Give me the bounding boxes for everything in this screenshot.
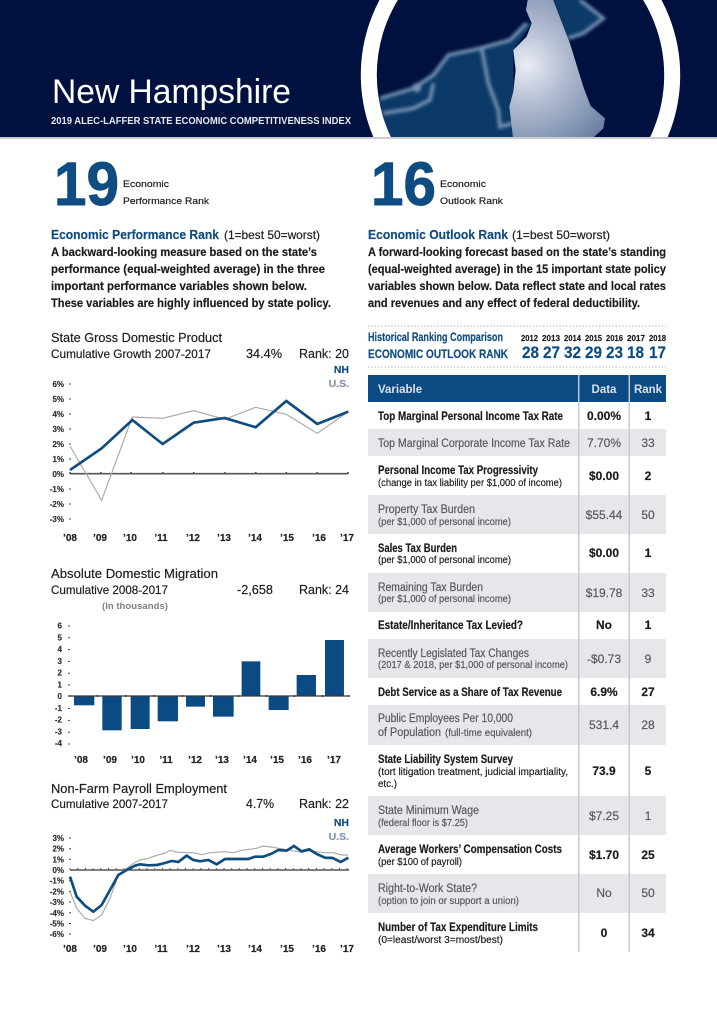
table header: Variable bbox=[378, 384, 422, 396]
chart heading: 4.7% bbox=[246, 796, 274, 811]
units note: (In thousands) bbox=[102, 601, 168, 612]
row: public employees: (full-time equivalent) bbox=[445, 728, 532, 739]
x axis years: ’16 bbox=[312, 944, 326, 955]
y axis bbox=[50, 380, 71, 524]
row: personal income tax rate bbox=[378, 409, 652, 423]
x axis years: ’17 bbox=[340, 944, 354, 955]
x axis years: ’10 bbox=[131, 755, 145, 766]
U.S. line bbox=[70, 846, 348, 921]
historical ranks bbox=[522, 343, 666, 362]
row: expenditure limits bbox=[378, 922, 655, 946]
panel: economic performance rank bbox=[51, 150, 331, 310]
y axis: -1% bbox=[50, 877, 64, 886]
row: remaining tax bbox=[378, 582, 655, 605]
row: legislated changes bbox=[378, 648, 652, 671]
row: debt service: 27 bbox=[641, 685, 655, 699]
x axis years: ’10 bbox=[123, 533, 137, 544]
chart heading: Absolute Domestic Migration bbox=[51, 566, 218, 581]
y axis: 1 bbox=[58, 680, 63, 689]
performance heading: Economic Performance Rank bbox=[51, 228, 219, 242]
y axis: 2% bbox=[52, 440, 64, 449]
row: personal income tax rate: 0.00% bbox=[587, 409, 621, 423]
row: public employees: Public Employees Per 10,000 bbox=[378, 713, 513, 725]
row: workers compensation: 25 bbox=[641, 848, 655, 862]
x axis years: ’13 bbox=[217, 944, 231, 955]
legend: NH bbox=[334, 817, 349, 829]
years: 2016 bbox=[606, 334, 624, 343]
row: estate tax: 1 bbox=[645, 618, 652, 632]
y axis: 4% bbox=[52, 410, 64, 419]
row: sales tax: Sales Tax Burden bbox=[378, 543, 457, 555]
row: workers compensation: Average Workers’ Compensation Costs bbox=[378, 844, 562, 856]
title: New Hampshire bbox=[52, 73, 291, 111]
row: tax progressivity bbox=[378, 465, 652, 489]
rank label bbox=[123, 179, 209, 207]
chart heading: Cumulative Growth 2007-2017 bbox=[51, 347, 211, 361]
y axis: -3% bbox=[50, 515, 64, 524]
historical ranks: 18 bbox=[627, 343, 644, 362]
performance description: A backward-looking measure based on the state’s bbox=[51, 245, 317, 259]
chart heading: -2,658 bbox=[237, 582, 273, 597]
row: debt service bbox=[378, 685, 655, 699]
x axis years: ’14 bbox=[243, 755, 257, 766]
row: legislated changes: (2017 & 2018, per $1,000 of personal income) bbox=[378, 660, 568, 671]
row: workers compensation bbox=[378, 844, 655, 868]
row: minimum wage: (federal floor is $7.25) bbox=[378, 818, 468, 829]
y axis: 1% bbox=[52, 855, 64, 864]
x axis years: ’15 bbox=[270, 755, 284, 766]
row: expenditure limits: 34 bbox=[641, 926, 655, 940]
historical ranks: 23 bbox=[606, 343, 623, 362]
row: right to work bbox=[378, 883, 655, 907]
x axis years: ’11 bbox=[154, 533, 168, 544]
outlook description bbox=[368, 245, 666, 310]
y axis bbox=[55, 622, 70, 748]
x axis years: ’09 bbox=[93, 533, 107, 544]
x axis years: ’14 bbox=[248, 533, 262, 544]
row: liability survey: State Liability System Survey bbox=[378, 754, 513, 766]
panel: variables table bbox=[368, 375, 666, 952]
row: corporate income tax rate: 33 bbox=[641, 436, 655, 450]
years: 2012 bbox=[521, 334, 539, 343]
performance heading: (1=best 50=worst) bbox=[224, 228, 320, 242]
row: property tax: $55.44 bbox=[586, 508, 623, 522]
outlook description: A forward-looking forecast based on the state’s standing bbox=[368, 245, 666, 259]
zero line bbox=[70, 472, 348, 474]
historical ranks: 32 bbox=[564, 343, 581, 362]
chart heading: 34.4% bbox=[246, 346, 282, 361]
row: public employees: of Population bbox=[378, 727, 441, 739]
y axis: 3% bbox=[52, 834, 64, 843]
row: remaining tax: $19.78 bbox=[586, 586, 623, 600]
historical ranks: 28 bbox=[522, 343, 539, 362]
chart heading: Rank: 24 bbox=[299, 582, 349, 597]
row: liability survey: 5 bbox=[645, 764, 652, 778]
row: minimum wage: $7.25 bbox=[589, 809, 619, 823]
row: sales tax bbox=[378, 543, 652, 566]
chart heading: Non-Farm Payroll Employment bbox=[51, 781, 227, 796]
outlook description: and revenues and any effect of federal deductibility. bbox=[368, 296, 640, 310]
x axis years: ’16 bbox=[312, 533, 326, 544]
y axis: 0% bbox=[52, 470, 64, 479]
y axis: 3 bbox=[58, 657, 63, 666]
chart heading: Rank: 20 bbox=[299, 346, 349, 361]
row: legislated changes: Recently Legislated Tax Changes bbox=[378, 648, 529, 660]
row: corporate income tax rate bbox=[378, 436, 655, 450]
y axis: 1% bbox=[52, 455, 64, 464]
chart heading: Cumulative 2008-2017 bbox=[51, 583, 168, 597]
subtitle: 2019 ALEC-LAFFER STATE ECONOMIC COMPETITIVENESS INDEX bbox=[51, 115, 351, 127]
x axis years: ’14 bbox=[248, 944, 262, 955]
big number 19: 19 bbox=[54, 150, 119, 218]
row: estate tax bbox=[378, 618, 652, 632]
alternate row shading bbox=[368, 429, 666, 913]
years: 2015 bbox=[585, 334, 603, 343]
y axis: -2% bbox=[50, 500, 64, 509]
row: property tax: (per $1,000 of personal income) bbox=[378, 517, 511, 528]
rank label: Economic bbox=[123, 179, 169, 190]
NH line bbox=[70, 846, 348, 912]
row: tax progressivity: Personal Income Tax Progressivity bbox=[378, 465, 538, 477]
y axis: -4 bbox=[55, 739, 63, 748]
rank label: Economic bbox=[440, 179, 486, 190]
row: minimum wage: State Minimum Wage bbox=[378, 805, 479, 817]
panel: historical ranking comparison bbox=[368, 326, 667, 367]
row: corporate income tax rate: Top Marginal Corporate Income Tax Rate bbox=[378, 438, 570, 450]
x axis years: ’11 bbox=[154, 944, 168, 955]
legend bbox=[329, 817, 349, 843]
y axis bbox=[50, 834, 71, 939]
y axis: 0% bbox=[52, 866, 64, 875]
chart heading bbox=[51, 781, 349, 811]
row: debt service: Debt Service as a Share of Tax Revenue bbox=[378, 687, 562, 699]
x axis years: ’10 bbox=[123, 944, 137, 955]
panel: payroll employment chart bbox=[50, 781, 354, 955]
row: legislated changes: 9 bbox=[645, 652, 652, 666]
row: tax progressivity: (change in tax liability per $1,000 of income) bbox=[378, 478, 562, 489]
x axis years: ’12 bbox=[186, 533, 200, 544]
performance heading bbox=[51, 228, 320, 242]
row: public employees: 531.4 bbox=[589, 718, 619, 732]
row: corporate income tax rate: 7.70% bbox=[587, 436, 621, 450]
y axis: 3% bbox=[52, 425, 64, 434]
x axis years: ’15 bbox=[280, 944, 294, 955]
row: sales tax: $0.00 bbox=[589, 546, 619, 560]
x axis years: ’17 bbox=[327, 755, 341, 766]
row: tax progressivity: $0.00 bbox=[589, 469, 619, 483]
row: expenditure limits: (0=least/worst 3=most/best) bbox=[378, 935, 503, 946]
y axis: 4 bbox=[58, 645, 63, 654]
legend: NH bbox=[334, 364, 349, 376]
row: right to work: No bbox=[596, 886, 612, 900]
x axis years: ’15 bbox=[280, 533, 294, 544]
y axis: -2% bbox=[50, 887, 64, 896]
row: expenditure limits: 0 bbox=[601, 926, 608, 940]
performance description: important performance variables shown below. bbox=[51, 279, 307, 293]
header banner bbox=[0, 0, 717, 139]
row: liability survey: 73.9 bbox=[592, 764, 616, 778]
y axis: -3% bbox=[50, 898, 64, 907]
row: estate tax: No bbox=[596, 618, 612, 632]
row: property tax: Property Tax Burden bbox=[378, 504, 475, 516]
row: sales tax: (per $1,000 of personal income) bbox=[378, 555, 511, 566]
map of New Hampshire in circle bbox=[360, 0, 680, 137]
comparison heading bbox=[368, 332, 509, 361]
row: remaining tax: (per $1,000 of personal income) bbox=[378, 594, 511, 605]
x axis years: ’16 bbox=[298, 755, 312, 766]
table header bbox=[368, 375, 666, 402]
y axis: -6% bbox=[50, 930, 64, 939]
x axis years: ’11 bbox=[159, 755, 173, 766]
row: remaining tax: 33 bbox=[641, 586, 655, 600]
x axis years bbox=[63, 944, 354, 955]
historical ranks: 27 bbox=[543, 343, 560, 362]
y axis: -1 bbox=[55, 704, 63, 713]
y axis: 5 bbox=[58, 633, 63, 642]
row: liability survey: (tort litigation treatment, judicial impartiality, bbox=[378, 767, 568, 778]
x axis years bbox=[74, 755, 341, 766]
table header: Rank bbox=[634, 384, 663, 396]
chart heading: Cumulative 2007-2017 bbox=[51, 797, 168, 811]
row: remaining tax: Remaining Tax Burden bbox=[378, 582, 483, 594]
row: expenditure limits: Number of Tax Expenditure Limits bbox=[378, 922, 538, 934]
y axis: -4% bbox=[50, 909, 64, 918]
years: 2017 bbox=[627, 334, 646, 343]
chart heading: State Gross Domestic Product bbox=[51, 330, 222, 345]
row: workers compensation: $1.70 bbox=[589, 848, 619, 862]
x axis years: ’08 bbox=[74, 755, 88, 766]
row: liability survey: etc.) bbox=[378, 779, 397, 790]
x axis years: ’12 bbox=[186, 944, 200, 955]
x axis years bbox=[63, 533, 354, 544]
years: 2014 bbox=[564, 334, 582, 343]
row: public employees bbox=[378, 713, 655, 739]
years: 2013 bbox=[542, 334, 561, 343]
y axis: -2 bbox=[55, 716, 63, 725]
y axis: 5% bbox=[52, 395, 64, 404]
row: debt service: 6.9% bbox=[590, 685, 618, 699]
panel: economic outlook rank bbox=[368, 150, 666, 310]
row: personal income tax rate: 1 bbox=[645, 409, 652, 423]
row: right to work: 50 bbox=[641, 886, 655, 900]
zero line bbox=[70, 868, 349, 870]
x axis years: ’09 bbox=[93, 944, 107, 955]
row: property tax: 50 bbox=[641, 508, 655, 522]
bars bbox=[74, 640, 344, 730]
y axis: 2 bbox=[58, 669, 63, 678]
x axis years: ’09 bbox=[103, 755, 117, 766]
row: minimum wage bbox=[378, 805, 652, 829]
chart heading bbox=[51, 330, 349, 361]
legend: U.S. bbox=[329, 378, 349, 390]
row: estate tax: Estate/Inheritance Tax Levied? bbox=[378, 620, 523, 632]
row: tax progressivity: 2 bbox=[645, 469, 652, 483]
performance description bbox=[51, 245, 331, 310]
rank label bbox=[440, 179, 503, 207]
comparison heading: ECONOMIC OUTLOOK RANK bbox=[368, 349, 509, 361]
NH line bbox=[70, 401, 348, 470]
historical ranks: 17 bbox=[649, 343, 666, 362]
outlook description: variables shown below. Data reflect state and local rates bbox=[368, 279, 666, 293]
outlook heading bbox=[368, 228, 610, 242]
rank label: Outlook Rank bbox=[440, 196, 503, 207]
row: right to work: Right-to-Work State? bbox=[378, 883, 477, 895]
row: workers compensation: (per $100 of payroll) bbox=[378, 857, 462, 868]
chart heading: Rank: 22 bbox=[299, 796, 349, 811]
y axis: 0 bbox=[58, 692, 63, 701]
years bbox=[521, 334, 667, 343]
x axis years: ’13 bbox=[215, 755, 229, 766]
x axis years: ’12 bbox=[188, 755, 202, 766]
performance description: These variables are highly influenced by state policy. bbox=[51, 296, 331, 310]
row: legislated changes: -$0.73 bbox=[587, 652, 621, 666]
U.S. line bbox=[70, 407, 348, 500]
y axis: -5% bbox=[50, 920, 64, 928]
panel: gross domestic product chart bbox=[50, 330, 354, 544]
panel: domestic migration chart bbox=[51, 566, 349, 766]
x axis years: ’17 bbox=[340, 533, 354, 544]
big number 16: 16 bbox=[371, 150, 436, 218]
x axis years: ’13 bbox=[217, 533, 231, 544]
row: property tax bbox=[378, 504, 655, 528]
table header: Data bbox=[592, 384, 617, 396]
outlook description: (equal-weighted average) in the 15 important state policy bbox=[368, 262, 666, 276]
y axis: -3 bbox=[55, 727, 63, 736]
row: minimum wage: 1 bbox=[645, 809, 652, 823]
historical ranks: 29 bbox=[585, 343, 602, 362]
x axis years: ’08 bbox=[63, 533, 77, 544]
y axis: 6% bbox=[52, 380, 64, 389]
row: sales tax: 1 bbox=[645, 546, 652, 560]
row: personal income tax rate: Top Marginal Personal Income Tax Rate bbox=[378, 411, 563, 423]
chart heading bbox=[51, 566, 349, 597]
row: liability survey bbox=[378, 754, 652, 790]
comparison heading: Historical Ranking Comparison bbox=[368, 332, 503, 344]
legend bbox=[329, 364, 349, 390]
outlook heading: (1=best 50=worst) bbox=[512, 228, 610, 242]
y axis: 2% bbox=[52, 845, 64, 854]
years: 2018 bbox=[649, 334, 667, 343]
rank label: Performance Rank bbox=[123, 196, 209, 207]
y axis: 6 bbox=[58, 622, 63, 630]
x axis years: ’08 bbox=[63, 944, 77, 955]
row: public employees: 28 bbox=[641, 718, 655, 732]
row: right to work: (option to join or support a union) bbox=[378, 896, 519, 907]
outlook heading: Economic Outlook Rank bbox=[368, 228, 508, 242]
performance description: performance (equal-weighted average) in the three bbox=[51, 262, 325, 276]
zero line bbox=[69, 695, 349, 697]
legend: U.S. bbox=[329, 831, 349, 843]
y axis: -1% bbox=[50, 485, 64, 494]
